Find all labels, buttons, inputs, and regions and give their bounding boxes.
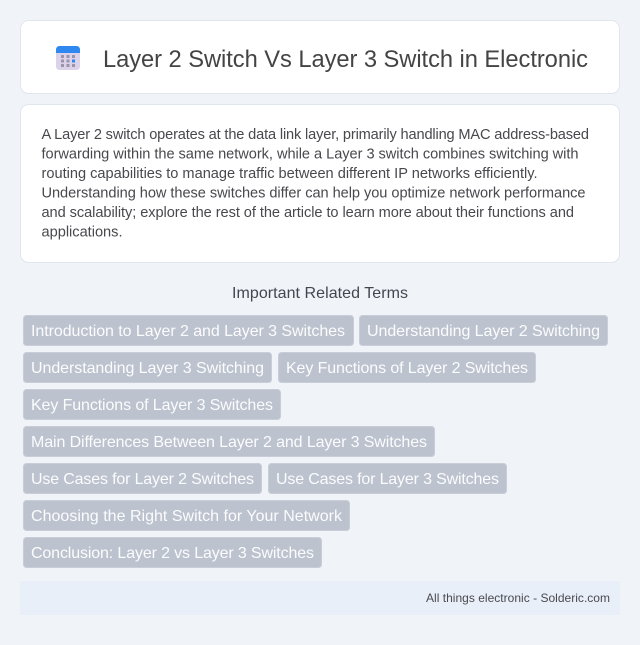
tag: Main Differences Between Layer 2 and Layer 3 Switches [31, 434, 427, 451]
text block: description [42, 127, 589, 240]
tag: Understanding Layer 2 Switching [367, 323, 600, 340]
tag [24, 316, 354, 346]
tag [24, 426, 434, 456]
tag [268, 464, 506, 494]
tag [24, 352, 272, 382]
text block: description: and scalability; explore the rest of the article to learn more about their functions and [42, 205, 574, 221]
title: Layer 2 Switch Vs Layer 3 Switch in Electronic [103, 47, 588, 73]
panel: description card [20, 104, 620, 262]
text block: description: Understanding how these switches differ can help you optimize network performance [42, 186, 586, 202]
panel: title card [20, 20, 620, 94]
icon: calendar grid [56, 46, 80, 70]
tag [24, 500, 350, 530]
text block: description: applications. [42, 224, 122, 240]
footer bar [20, 581, 620, 615]
tag [24, 464, 262, 494]
tag: Key Functions of Layer 3 Switches [31, 397, 273, 414]
footer credit: All things electronic - Solderic.com [426, 591, 610, 605]
text block: description: routing capabilities to manage traffic between different IP networks efficiently. [42, 166, 538, 182]
tag: Introduction to Layer 2 and Layer 3 Switches [31, 323, 345, 340]
heading: important related terms: Important Related Terms [232, 285, 408, 302]
tag [360, 316, 608, 346]
tag [278, 352, 536, 382]
tag: Choosing the Right Switch for Your Network [31, 508, 343, 525]
panel: related term tags [24, 316, 608, 568]
tag: Conclusion: Layer 2 vs Layer 3 Switches [31, 545, 314, 562]
tag: Use Cases for Layer 3 Switches [276, 471, 499, 488]
text block: description: A Layer 2 switch operates at the data link layer, primarily handling MAC address-based [42, 127, 589, 143]
tag: Understanding Layer 3 Switching [31, 360, 264, 377]
tag: Key Functions of Layer 2 Switches [286, 360, 528, 377]
tag: Use Cases for Layer 2 Switches [31, 471, 254, 488]
tag [24, 390, 280, 420]
text block: description: forwarding within the same network, while a Layer 3 switch combines switching with [42, 146, 578, 162]
tag [24, 538, 322, 568]
